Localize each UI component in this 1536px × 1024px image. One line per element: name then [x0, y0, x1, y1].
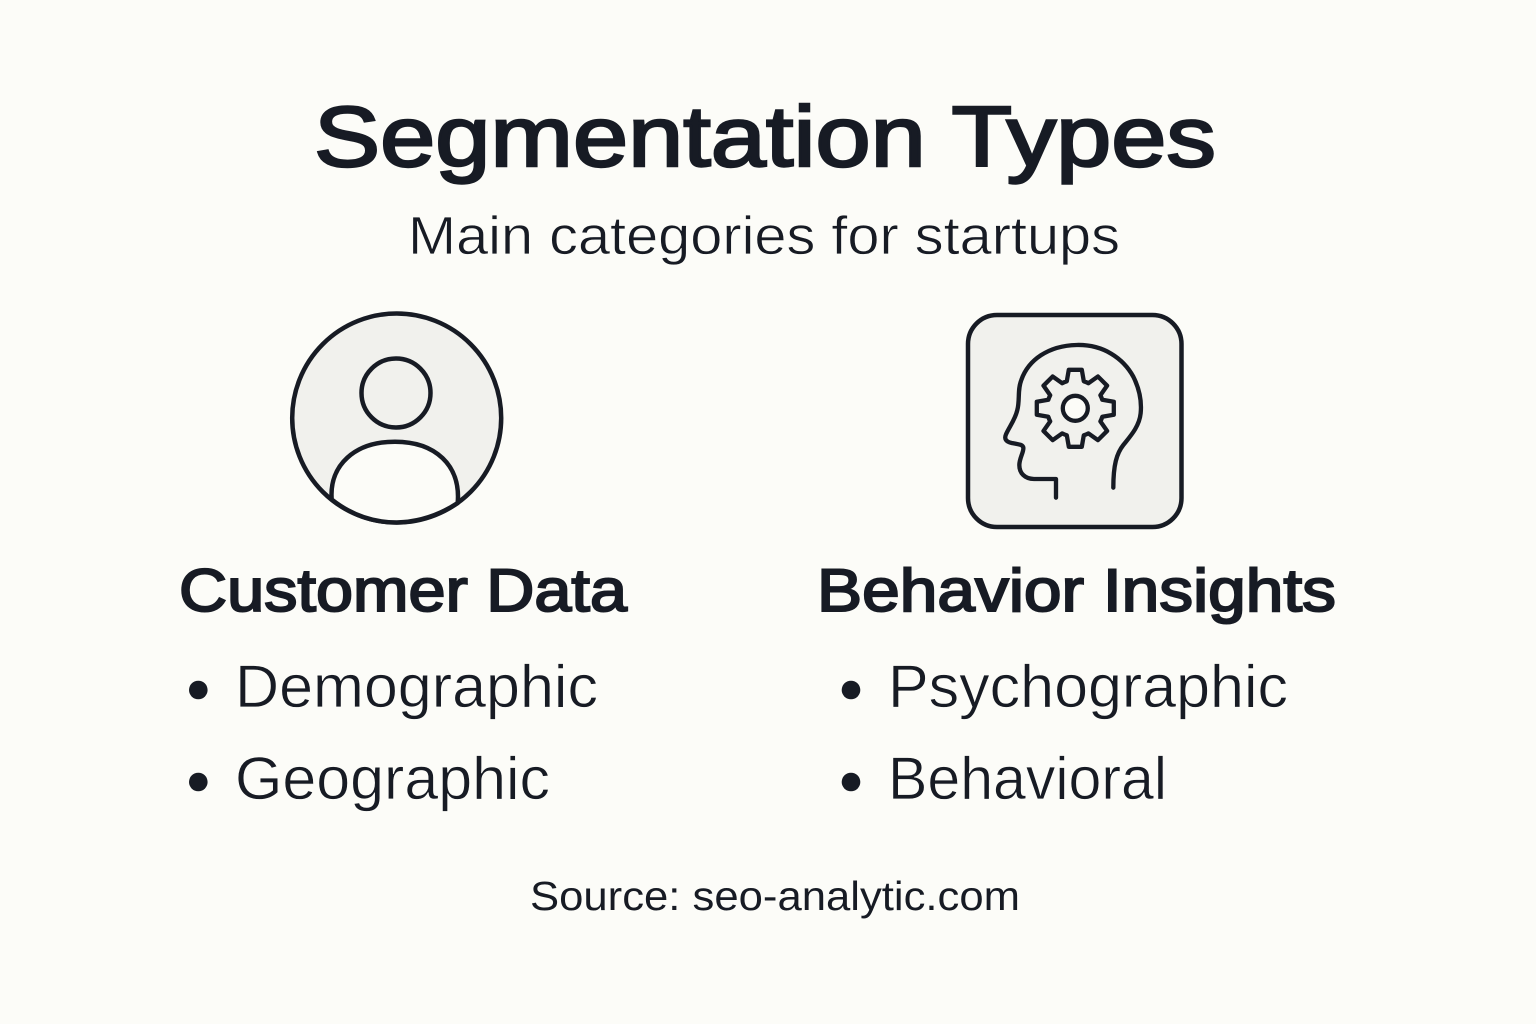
title: Segmentation Types — [314, 90, 1216, 185]
list: behavior insights items — [842, 653, 1288, 812]
list: customer data items: Geographic — [235, 745, 550, 812]
icon: person in circle — [292, 314, 501, 522]
panel: behavior insights — [817, 315, 1336, 812]
icon: head with gear — [968, 315, 1182, 527]
subtitle: Main categories for startups — [408, 206, 1120, 266]
source note: Source: seo-analytic.com — [530, 873, 1020, 919]
panel: customer data — [179, 314, 628, 812]
list: customer data items — [189, 653, 598, 812]
heading: behavior insights: Behavior Insights — [817, 557, 1336, 624]
list: behavior insights items: Behavioral — [888, 745, 1167, 812]
list: behavior insights items: Psychographic — [888, 653, 1288, 720]
heading: customer data: Customer Data — [179, 557, 628, 624]
list: customer data items: Demographic — [235, 653, 598, 720]
